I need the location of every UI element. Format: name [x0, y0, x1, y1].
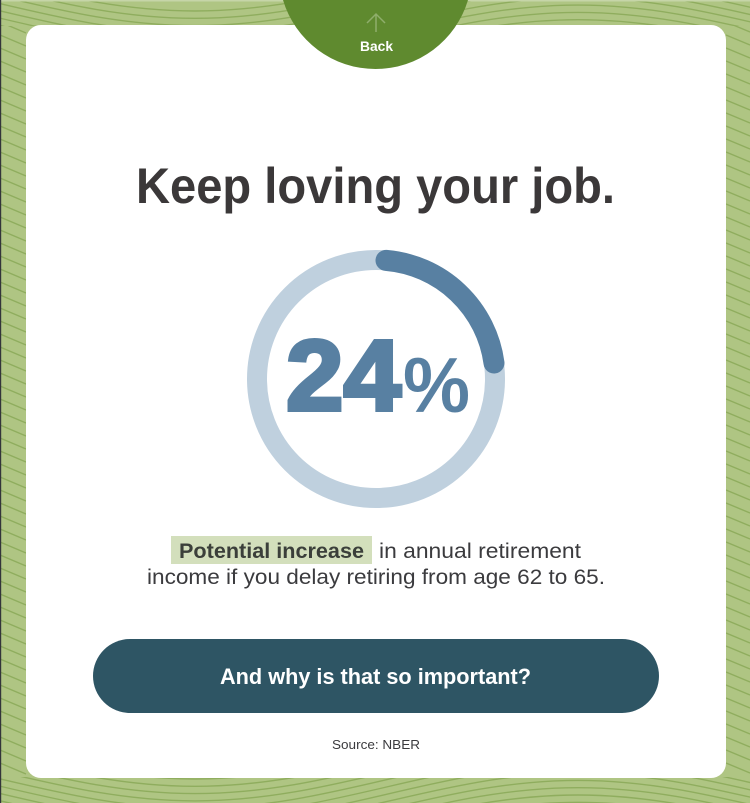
line one: in annual retirement — [379, 540, 581, 563]
progress arc — [386, 260, 494, 363]
value: 24: 24 — [286, 320, 401, 432]
highlight — [171, 536, 372, 564]
chart: 24% progress ring — [257, 260, 495, 498]
highlighted phrase: Potential increase — [179, 540, 364, 563]
icon: up arrow — [367, 14, 385, 32]
title: Keep loving your job. — [136, 158, 615, 214]
source note: Source: NBER — [332, 737, 420, 752]
line two: income if you delay retiring from age 62 to 65. — [147, 566, 605, 589]
text block: description — [147, 536, 605, 589]
value: percent sign: % — [403, 341, 470, 429]
back label: Back — [360, 38, 393, 54]
button label: And why is that so important? — [220, 664, 531, 689]
back button — [283, 0, 468, 69]
button: call to action — [93, 639, 659, 713]
